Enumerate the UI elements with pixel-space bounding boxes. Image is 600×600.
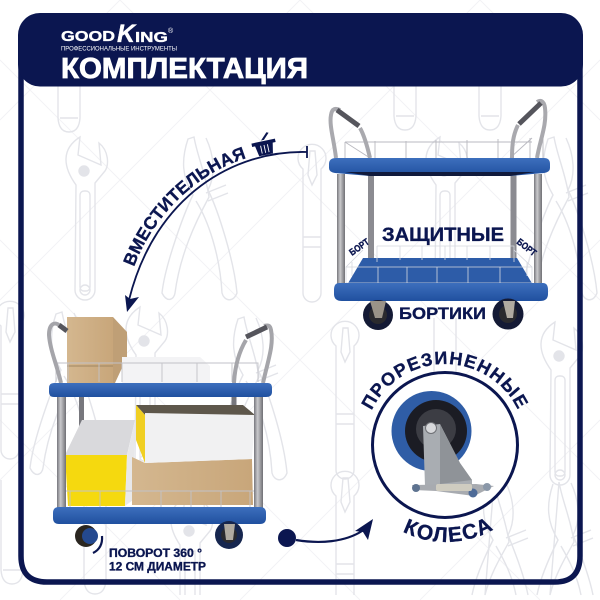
front legs [57,396,66,508]
label: защитные: ЗАЩИТНЫЕ [382,224,504,246]
handles [49,324,272,383]
label: борт left: БОРТ [347,237,372,258]
curved label: колеса: КОЛЕСА [404,518,494,542]
icon: basket [250,131,278,157]
wheels [75,521,243,549]
back legs [82,396,234,430]
loaded cart photo [49,317,272,549]
curved label: прорезиненные: ПРОРЕЗИНЕННЫЕ [361,351,528,410]
white box on top shelf [122,357,210,383]
logo: Good King: ПРОФЕССИОНАЛЬНЫЕ ИНСТРУМЕНТЫ [61,46,177,52]
lower shelf [334,283,548,301]
upper wire rail [345,138,543,158]
curved arrow: вместительная [125,146,307,312]
label: бортики: БОРТИКИ [399,304,486,323]
lower wire rail [346,246,532,283]
label: поворот: ПОВОРОТ 360 ° [109,548,202,560]
cardboard box on top shelf [67,317,127,383]
wire rails [56,363,262,507]
lower deck [347,258,533,285]
curved label: вместительная: ВМЕСТИТЕЛЬНАЯ [123,146,246,266]
lower cardboard box [132,457,253,505]
upper shelf [49,383,272,397]
empty cart photo [329,101,550,330]
arrow to wheel callout [278,519,373,547]
front legs [337,174,345,284]
label: борт right: БОРТ [514,237,538,259]
header banner [18,13,583,86]
logo: Good King [61,20,177,52]
logo: Good King: ING [135,29,168,46]
lower shelf [53,507,266,524]
handles [331,109,370,158]
logo: Good King: GOOD [61,29,115,45]
logo: Good King: ® [168,27,174,35]
white box on lower deck [136,405,255,463]
back legs [371,174,514,260]
wheel callout circle [372,372,518,518]
icon: caster wheel [392,391,494,498]
wheels [363,298,524,330]
upper shelf [329,158,550,176]
title: КОМПЛЕКТАЦИЯ [61,53,308,85]
rotation arc [93,536,102,553]
label: диаметр: 12 СМ ДИАМЕТР [109,562,206,574]
logo: Good King: K [117,20,137,48]
yellow box [65,420,135,506]
